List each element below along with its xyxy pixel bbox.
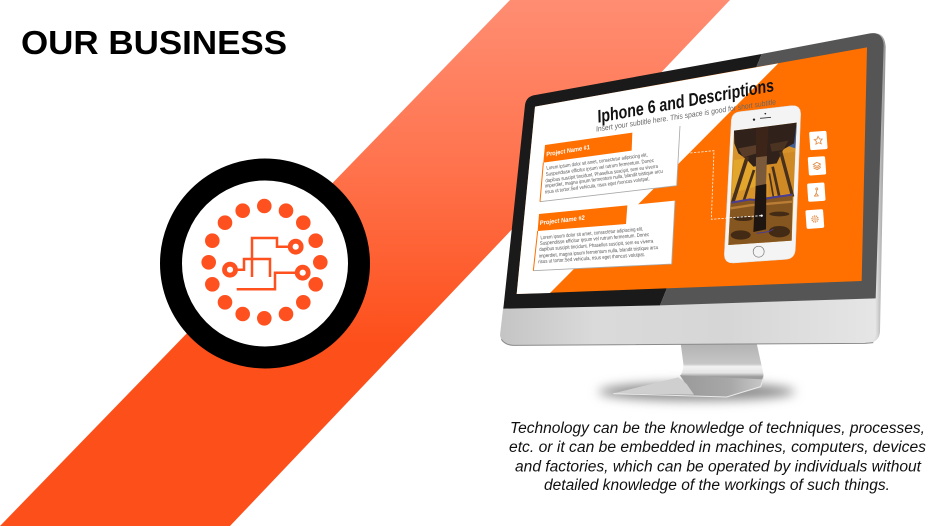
phone speaker and camera [753,113,771,121]
card 2 body text: Suspendisse efficitur ipsum vel rutrum fermentum. Donec [540,232,650,247]
stand neck [680,343,763,387]
icon: layers [808,156,826,176]
screen orange background [517,47,867,294]
card 2 heading bar [538,205,627,231]
phone mockup [724,106,801,263]
card 1 body text [544,152,663,196]
icon: gear [805,209,824,229]
icon buttons [805,131,828,229]
card 2 body text: imperdiet, magna ipsum fermentum nulla, blandit tristique arcu [539,245,659,260]
phone home button [753,246,764,257]
card 2 body text [538,226,659,265]
right edge highlight [863,33,886,343]
stand shadow [598,383,795,401]
monitor body [500,33,886,345]
phone body [724,106,801,263]
card 1 body text: risus ut tortor.Sed vehicula, risus eget rhoncus volutpat. [544,176,650,196]
project card 1: Project Name #1 [546,144,591,158]
card 2 body text: Lorem ipsum dolor sit amet, consectetur adipiscing elit, [540,226,643,241]
phone photo connector end [726,214,763,218]
bezel black part [503,54,762,309]
slide subtitle: Insert your subtitle here. This space is good for short subtitle [595,97,777,134]
description paragraph [509,420,926,494]
description paragraph: Technology can be the knowledge of techniques, processes, [510,420,925,437]
phone photo of pier [728,123,797,245]
card 1 body text: Lorem ipsum dolor sit amet, consectetur adipiscing elit, [546,152,648,172]
card 2 body text: risus ut tortor.Sed vehicula, risus eget rhoncus volutpat. [538,252,645,265]
description paragraph: detailed knowledge of the workings of such things. [544,477,890,494]
pier deck [734,123,797,167]
icon: star [809,131,828,150]
ring of dots [201,199,328,326]
bezel grey part [660,33,884,305]
project card 2 [533,201,675,271]
slide title: Iphone 6 and Descriptions [595,75,776,127]
description paragraph: and factories, which can be operated by individuals without [515,458,922,476]
dashed connector [687,151,728,219]
project card 1 [540,126,680,202]
circular technology icon [171,170,359,358]
description paragraph: etc. or it can be embedded in machines, computers, devices [509,439,926,456]
silver chin [500,297,876,345]
card 1 body text: imperdiet, magna ipsum fermentum nulla, blandit tristique arcu [544,169,663,190]
desktop monitor mockup [500,33,886,401]
monitor stand [613,343,764,397]
card 1 body text: dapibus suscipit tincidunt. Phasellus suscipit, sem eu viverra [545,164,658,184]
circuit traces [224,238,308,289]
stand foot [680,375,763,397]
diagonal orange stripe [0,0,730,526]
central pillar [756,127,768,158]
screen [517,47,867,294]
icon: figure [807,182,826,202]
sand and water [728,194,793,245]
card 1 body text: Suspendisse efficitur ipsum vel rutrum fermentum. Donec [545,158,655,178]
project card 2: Project Name #2 [539,215,586,227]
screen white wedge [517,63,778,294]
black ring [171,170,359,358]
card 1 heading bar [543,133,632,163]
title: OUR BUSINESS [21,25,287,62]
card 2 body text: dapibus suscipit tincidunt. Phasellus suscipit, sem eu viverra [539,239,654,253]
pier legs [733,152,793,203]
